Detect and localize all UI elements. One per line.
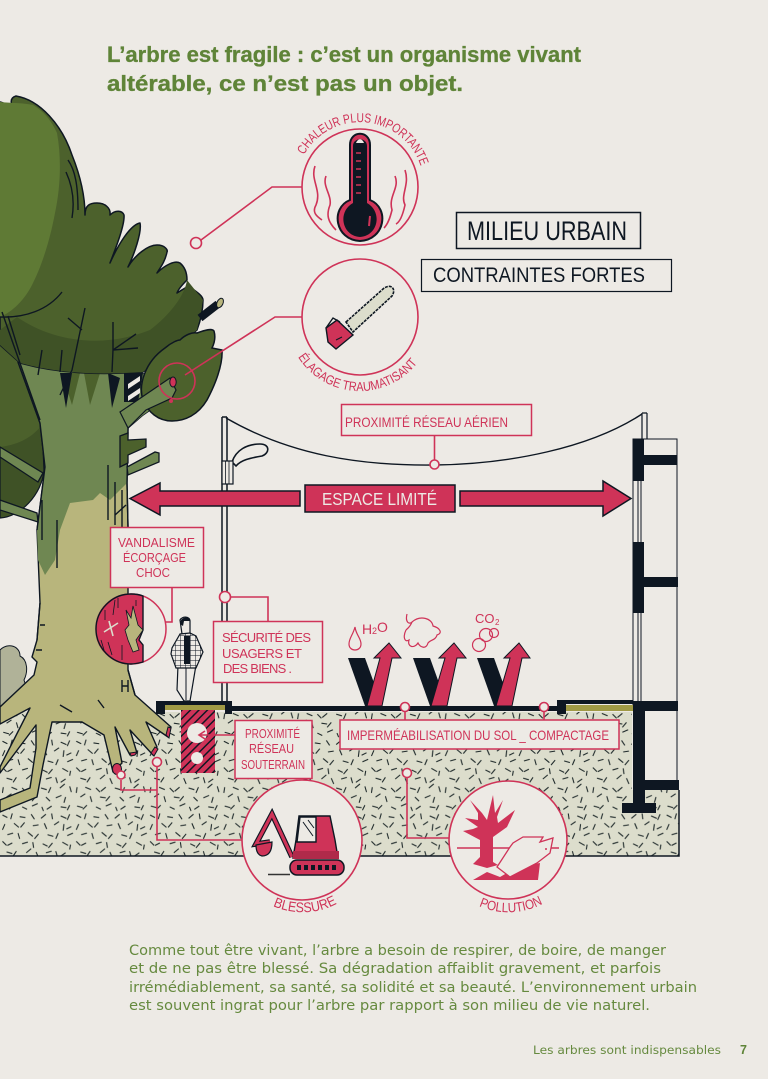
label: pollution: POLLUTION: [480, 896, 542, 912]
icon: CO2 bubbles: [472, 611, 500, 652]
arrow: right limit: [460, 481, 631, 516]
icon: CO2 bubbles: CO: [475, 611, 494, 626]
pruned branch stub: [200, 297, 225, 318]
heading box: contraintes fortes: [422, 260, 672, 292]
page number: 7: [740, 1043, 747, 1057]
label: blessure: BLESSURE: [274, 895, 336, 912]
body text: et de ne pas être blessé. Sa dégradation affaiblit gravement, et parfois: [129, 961, 661, 977]
icon: water drop with H2O: [349, 619, 388, 650]
body text: est souvent ingrat pour l’arbre par rapport à son milieu de vie naturel.: [129, 998, 650, 1014]
label: proximite reseau aerien: [342, 404, 532, 469]
label: impermeabilisation: IMPERMÉABILISATION DU SOL _ COMPACTAGE: [347, 727, 609, 743]
label: vandalisme: [110, 528, 204, 622]
exchange arrows: water: [348, 643, 401, 706]
heading box: milieu urbain: MILIEU URBAIN: [467, 216, 627, 246]
label: securite des usagers: USAGERS ET: [222, 646, 302, 661]
pruned leaf clump: [141, 330, 222, 421]
label: espace limite: [305, 485, 455, 512]
wound highlight circle: [159, 363, 195, 399]
label: proximite reseau aerien: PROXIMITÉ RÉSEAU AÉRIEN: [345, 414, 508, 430]
building facade: [622, 413, 679, 813]
trunk side branches: [0, 433, 159, 522]
icon: leaf: [404, 614, 440, 647]
tree background foliage: [0, 338, 44, 518]
pedestrian figure: [171, 617, 203, 701]
heading box: contraintes fortes: CONTRAINTES FORTES: [433, 264, 645, 287]
label: espace limite: ESPACE LIMITÉ: [322, 489, 437, 509]
label: proximite reseau souterrain: SOUTERRAIN: [241, 758, 305, 772]
label: securite des usagers: SÉCURITÉ DES: [222, 630, 311, 645]
icon: pollution: [449, 781, 567, 899]
arrow: left limit: [130, 483, 300, 515]
icon: CO2 bubbles: 2: [495, 618, 500, 627]
title: altérable, ce n’est pas un objet.: [107, 71, 463, 96]
label: chaleur plus importante: CHALEUR PLUS IMPORTANTE: [298, 113, 429, 166]
title: [107, 42, 581, 96]
icon: chainsaw: [302, 259, 418, 375]
icon: damaged bark: [96, 594, 166, 664]
label: securite des usagers: DES BIENS .: [223, 661, 292, 676]
label: securite des usagers: [214, 592, 322, 682]
root wound tips: [112, 727, 171, 774]
icon: water drop with H2O: H: [362, 621, 372, 637]
ladder gap in canopy: [124, 373, 143, 402]
label: proximite reseau souterrain: [199, 720, 312, 778]
label: vandalisme: VANDALISME: [118, 535, 195, 550]
label: impermeabilisation: [340, 702, 619, 749]
leader lines to upper icons: [185, 187, 302, 375]
pollution leader line: [402, 768, 449, 838]
trunk: [0, 362, 171, 812]
small bush: [0, 646, 28, 716]
icon: water drop with H2O: O: [377, 619, 388, 635]
lamp post: [222, 417, 268, 702]
canopy: [0, 96, 203, 420]
soil with speckle: [0, 712, 679, 856]
label: proximite reseau souterrain: RÉSEAU: [249, 741, 294, 756]
icon: water drop with H2O: 2: [372, 626, 377, 636]
injury leader lines: [117, 758, 243, 840]
label: vandalisme: ÉCORÇAGE: [123, 550, 186, 565]
icon: thermometer: [302, 129, 418, 245]
pavement and road surface: [156, 700, 633, 714]
icon: excavator: [242, 780, 362, 900]
title: L’arbre est fragile : c’est un organisme vivant: [107, 42, 581, 67]
exchange arrows: air: [413, 643, 466, 706]
body text: irrémédiablement, sa santé, sa solidité et sa beauté. L’environnement urbain: [129, 980, 697, 996]
overhead cable: [226, 414, 642, 465]
underground conduit: [181, 710, 215, 773]
footer running title: Les arbres sont indispensables: [533, 1043, 721, 1057]
exchange arrows: gas: [477, 643, 530, 706]
body text: Comme tout être vivant, l’arbre a besoin de respirer, de boire, de manger: [129, 943, 666, 959]
body text: [129, 943, 697, 1014]
pruned branch: [120, 377, 176, 428]
label: vandalisme: CHOC: [136, 565, 170, 580]
label: proximite reseau souterrain: PROXIMITÉ: [245, 726, 300, 741]
label: elagage traumatisant: ÉLAGAGE TRAUMATISANT: [298, 352, 416, 392]
